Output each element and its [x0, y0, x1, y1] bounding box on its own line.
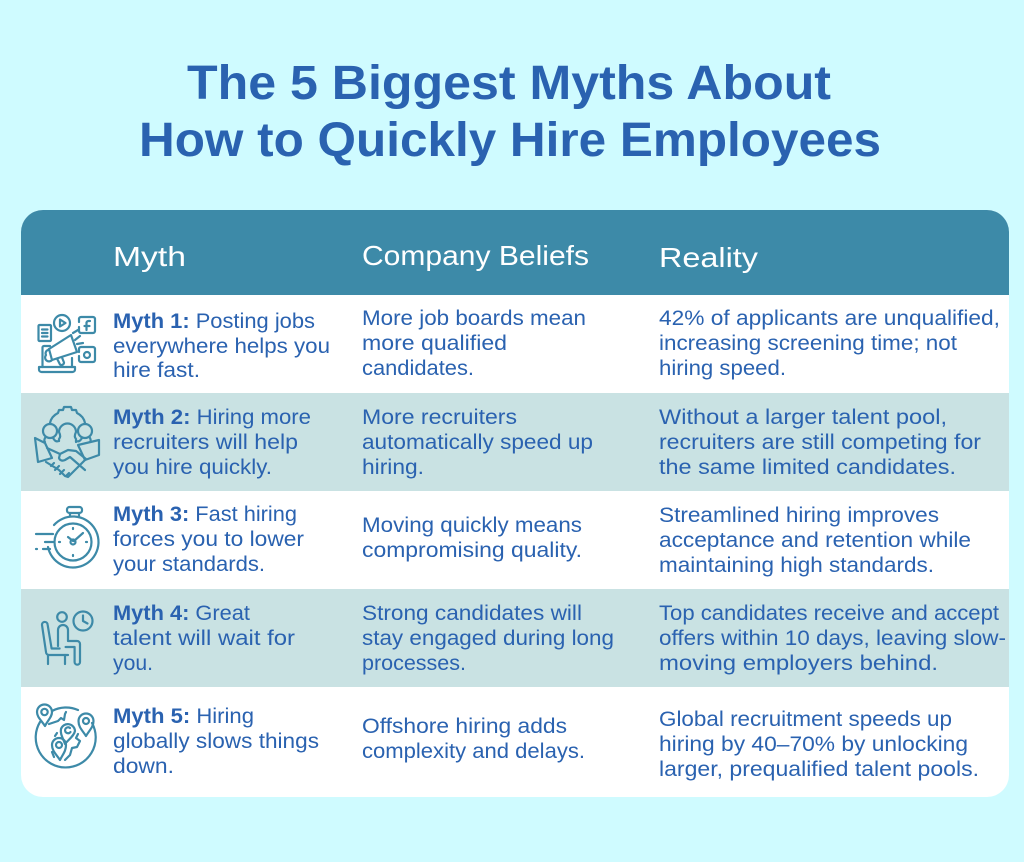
icon: person waiting with clock: [42, 612, 92, 665]
belief 4 text: [362, 601, 614, 675]
reality 5 text: hiring by 40–70% by unlocking: [659, 732, 968, 756]
reality 3 text: maintaining high standards.: [659, 553, 934, 577]
myth 2 text: you hire quickly.: [113, 455, 272, 479]
belief 1 text: [362, 306, 586, 380]
reality 3 text: [659, 503, 971, 577]
myth 1 text: Myth 1: Posting jobs: [113, 309, 315, 333]
table header: [113, 240, 758, 273]
belief 5 text: complexity and delays.: [362, 739, 585, 763]
belief 2 text: automatically speed up: [362, 430, 593, 454]
row 4: [42, 601, 1006, 675]
row 1: [38, 306, 1000, 382]
belief 3 text: [362, 513, 582, 562]
myth 3 text: your standards.: [113, 552, 265, 576]
myth 5 text: globally slows things: [113, 729, 319, 753]
icon: megaphone and social media: [38, 315, 95, 372]
myth 1 text: hire fast.: [113, 358, 200, 382]
reality 3 text: acceptance and retention while: [659, 528, 971, 552]
belief 2 text: hiring.: [362, 455, 424, 479]
row 5: [36, 704, 979, 781]
belief 1 text: candidates.: [362, 356, 474, 380]
myth 2 text: Myth 2: Hiring more: [113, 405, 311, 429]
belief 2 text: [362, 405, 593, 479]
reality 2 text: recruiters are still competing for: [659, 430, 981, 454]
table panel: [21, 210, 1009, 797]
icon: globe with location pins: [36, 705, 96, 767]
icon: team and handshake: [35, 407, 99, 477]
reality 4 text: offers within 10 days, leaving slow-: [659, 626, 1006, 650]
reality 5 text: Global recruitment speeds up: [659, 707, 952, 731]
reality 2 text: Without a larger talent pool,: [659, 405, 947, 429]
reality 5 text: [659, 707, 979, 781]
belief 4 text: stay engaged during long: [362, 626, 614, 650]
myth 1 text: [113, 309, 330, 382]
table header: Myth: [113, 241, 186, 272]
myth 4 text: Myth 4: Great: [113, 601, 250, 625]
myth 3 text: [113, 502, 304, 576]
belief 1 text: more qualified: [362, 331, 507, 355]
myth 3 text: forces you to lower: [113, 527, 304, 551]
row 3: [36, 502, 971, 577]
myth 4 text: [113, 601, 295, 675]
reality 1 text: hiring speed.: [659, 356, 786, 380]
reality 1 text: increasing screening time; not: [659, 331, 957, 355]
reality 1 text: 42% of applicants are unqualified,: [659, 306, 1000, 330]
myth 4 text: you.: [113, 651, 153, 675]
myth 5 text: down.: [113, 754, 174, 778]
reality 4 text: [659, 601, 1006, 675]
myth 5 text: [113, 704, 319, 778]
reality 5 text: larger, prequalified talent pools.: [659, 757, 979, 781]
reality 4 text: Top candidates receive and accept: [659, 601, 999, 625]
reality 2 text: the same limited candidates.: [659, 455, 956, 479]
title: [139, 57, 881, 167]
reality 1 text: [659, 306, 1000, 380]
icon: stopwatch: [36, 507, 99, 568]
row 2: [35, 405, 981, 479]
table header: Company Beliefs: [362, 240, 589, 271]
belief 4 text: processes.: [362, 651, 466, 675]
reality 3 text: Streamlined hiring improves: [659, 503, 939, 527]
belief 5 text: [362, 714, 585, 763]
myth 1 text: everywhere helps you: [113, 334, 330, 358]
belief 2 text: More recruiters: [362, 405, 517, 429]
table header: Reality: [659, 242, 758, 273]
belief 5 text: Offshore hiring adds: [362, 714, 567, 738]
title: The 5 Biggest Myths About: [187, 57, 831, 110]
title: How to Quickly Hire Employees: [139, 114, 881, 167]
reality 4 text: moving employers behind.: [659, 651, 938, 675]
myth 2 text: recruiters will help: [113, 430, 298, 454]
belief 4 text: Strong candidates will: [362, 601, 582, 625]
reality 2 text: [659, 405, 981, 479]
myth 4 text: talent will wait for: [113, 626, 295, 650]
belief 1 text: More job boards mean: [362, 306, 586, 330]
myth 5 text: Myth 5: Hiring: [113, 704, 254, 728]
myth 2 text: [113, 405, 311, 479]
belief 3 text: Moving quickly means: [362, 513, 582, 537]
myth 3 text: Myth 3: Fast hiring: [113, 502, 297, 526]
belief 3 text: compromising quality.: [362, 538, 582, 562]
